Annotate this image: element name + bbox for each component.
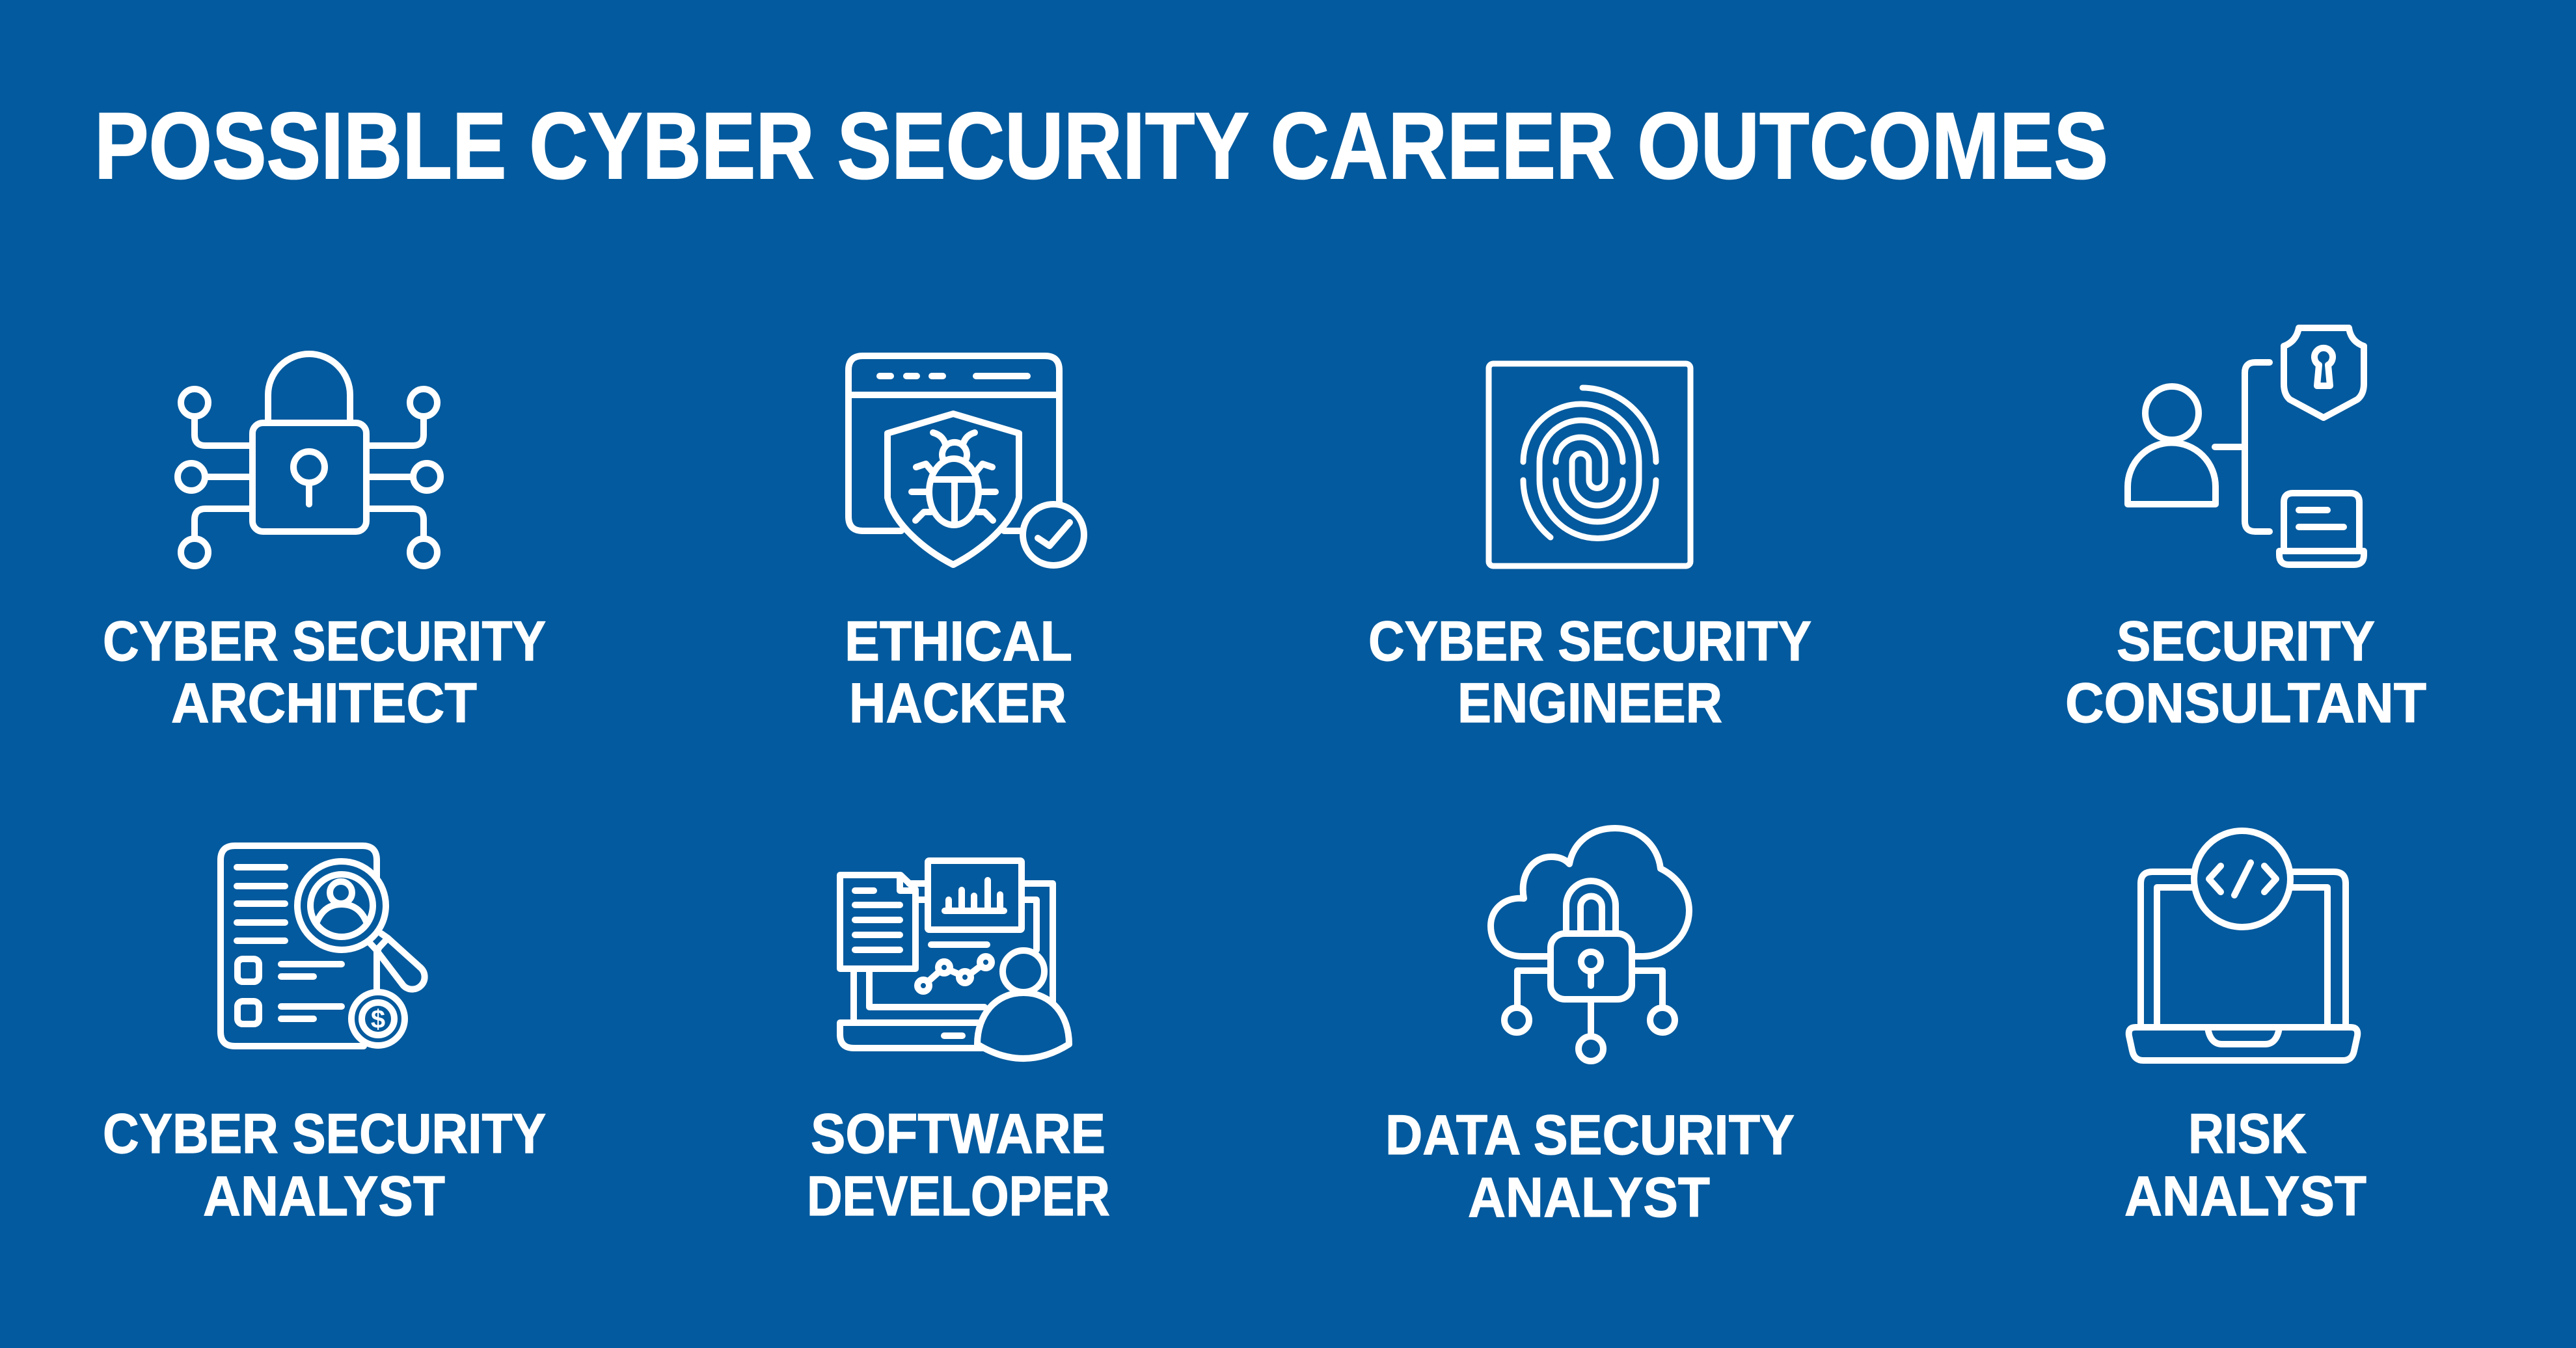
label: SECURITY — [2117, 610, 2375, 673]
label — [103, 610, 546, 735]
label: CYBER SECURITY — [103, 1103, 546, 1165]
label: CONSULTANT — [2065, 672, 2426, 735]
label: HACKER — [849, 672, 1066, 735]
label — [2065, 610, 2426, 735]
icon: dollar sign: $ — [371, 1005, 385, 1034]
label — [2124, 1103, 2366, 1228]
panel: software developer — [807, 861, 1110, 1228]
panel: cyber security architect — [103, 354, 546, 735]
label: ENGINEER — [1457, 672, 1722, 735]
panel: cyber security engineer — [1368, 364, 1811, 735]
label: DEVELOPER — [807, 1165, 1110, 1228]
panel: risk analyst — [2124, 831, 2366, 1228]
label: CYBER SECURITY — [1368, 610, 1811, 673]
label: ANALYST — [203, 1165, 445, 1228]
icon: browser window with bug shield and check — [848, 356, 1084, 565]
label: ANALYST — [1468, 1166, 1710, 1229]
icon: laptop with document, chart and person — [840, 861, 1069, 1058]
icon: padlock with circuit nodes — [178, 354, 441, 566]
icon: cloud with padlock and nodes — [1491, 828, 1689, 1061]
label: ARCHITECT — [171, 672, 477, 735]
icon: report with magnifier and dollar coin — [221, 846, 425, 1046]
label — [1385, 1104, 1795, 1229]
panel: security consultant — [2065, 328, 2426, 735]
label — [807, 1103, 1110, 1228]
panel: ethical hacker — [845, 356, 1084, 735]
label — [845, 610, 1072, 735]
icon: laptop with code badge — [2129, 831, 2357, 1060]
label: CYBER SECURITY — [103, 610, 546, 673]
label — [1368, 610, 1811, 735]
panel: cyber security analyst — [103, 846, 546, 1228]
label — [103, 1103, 546, 1228]
panel: data security analyst — [1385, 828, 1795, 1229]
label: ETHICAL — [845, 610, 1072, 673]
label: RISK — [2188, 1103, 2307, 1165]
title: POSSIBLE CYBER SECURITY CAREER OUTCOMES — [94, 93, 2108, 198]
label: DATA SECURITY — [1385, 1104, 1795, 1166]
icon: person linked to shield and laptop — [2128, 328, 2364, 565]
label: SOFTWARE — [811, 1103, 1105, 1165]
icon: fingerprint in a square — [1489, 364, 1690, 566]
label: ANALYST — [2124, 1165, 2366, 1228]
